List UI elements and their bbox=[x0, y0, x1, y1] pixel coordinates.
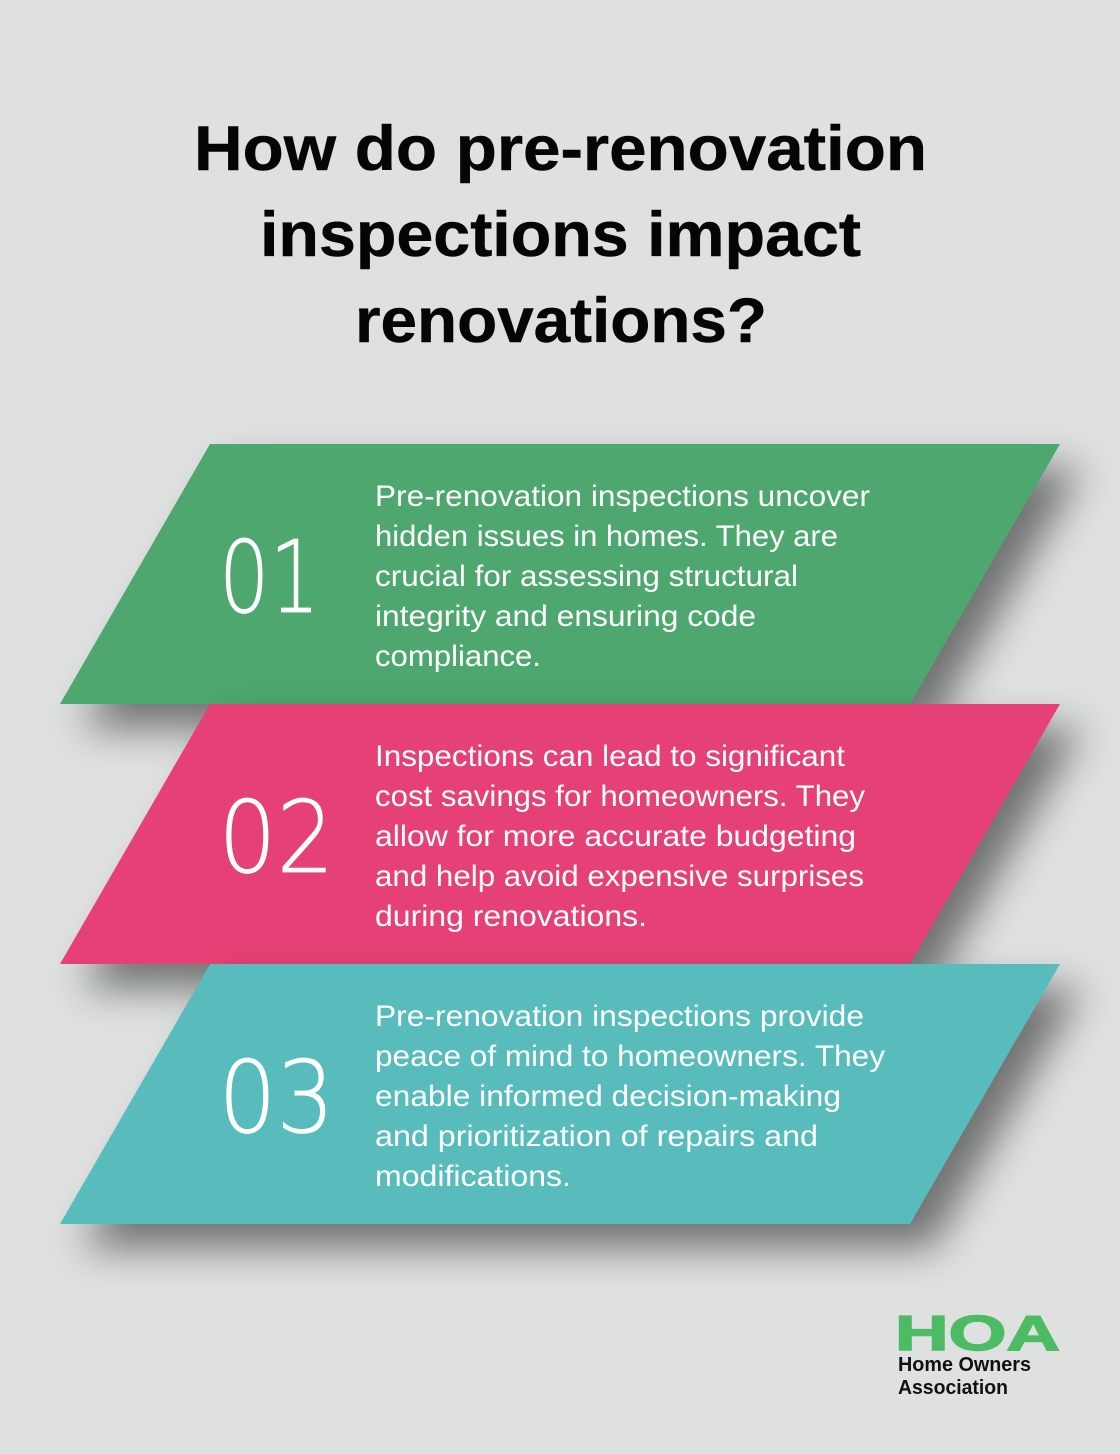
panel: step 01: 01 bbox=[219, 519, 320, 636]
panel: step 02: Inspections can lead to significant bbox=[375, 740, 846, 773]
panel: step 02 bbox=[60, 704, 1060, 964]
panel: step 02: cost savings for homeowners. They bbox=[375, 780, 865, 813]
panel: step 01: integrity and ensuring code bbox=[375, 600, 756, 633]
logo: Home Owners Association: Association bbox=[898, 1377, 1008, 1399]
title: inspections impact bbox=[260, 200, 861, 270]
panel: step 01: Pre-renovation inspections uncover bbox=[375, 480, 870, 513]
title: How do pre-renovation bbox=[194, 114, 927, 184]
panel: step 01: compliance. bbox=[375, 640, 541, 673]
logo: Home Owners Association: HOA bbox=[895, 1307, 1060, 1361]
title: renovations? bbox=[355, 286, 767, 356]
panel: step 03 bbox=[60, 964, 1060, 1224]
logo: Home Owners Association: Home Owners bbox=[898, 1354, 1031, 1376]
panel: step 01 bbox=[60, 444, 1060, 704]
panel: step 01: hidden issues in homes. They are bbox=[375, 520, 838, 553]
panel: step 03: enable informed decision-making bbox=[375, 1080, 841, 1113]
logo: Home Owners Association bbox=[895, 1307, 1060, 1399]
panel: step 02: during renovations. bbox=[375, 900, 647, 933]
panel: step 03: 03 bbox=[218, 1039, 334, 1156]
title bbox=[194, 114, 927, 356]
panel: step 02: and help avoid expensive surprises bbox=[375, 860, 864, 893]
panel: step 02: allow for more accurate budgeting bbox=[375, 820, 856, 853]
panel: step 01: crucial for assessing structural bbox=[375, 560, 798, 593]
panel: step 03: and prioritization of repairs and bbox=[375, 1120, 818, 1153]
panel: step 03: modifications. bbox=[375, 1160, 571, 1193]
panel: step 02: 02 bbox=[218, 779, 334, 896]
panel: step 03: peace of mind to homeowners. They bbox=[375, 1040, 885, 1073]
panel: step 03: Pre-renovation inspections provide bbox=[375, 1000, 864, 1033]
